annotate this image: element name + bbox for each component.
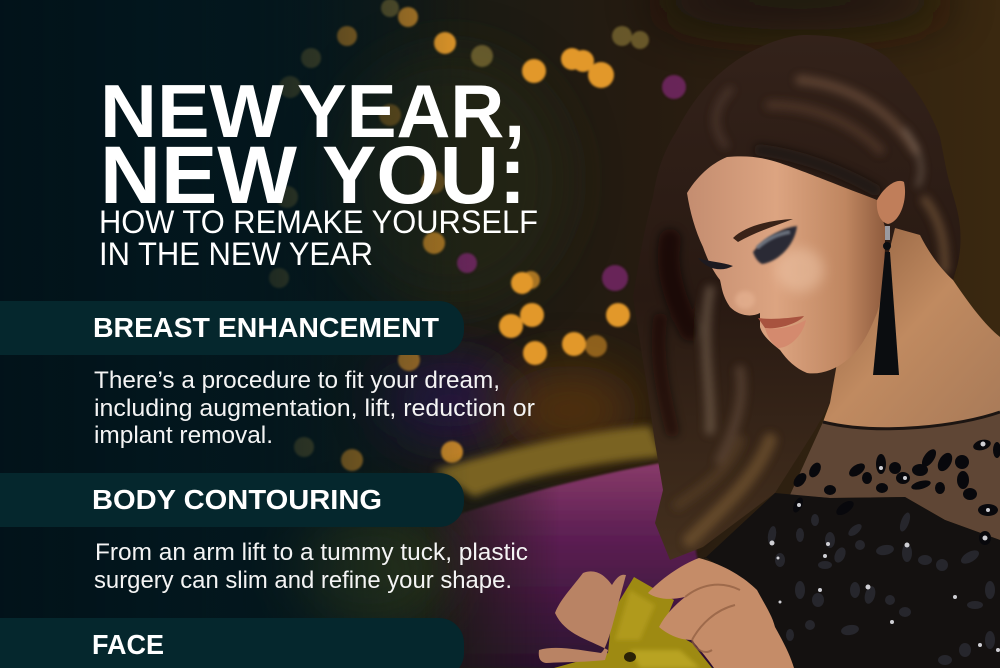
subtitle (99, 204, 538, 272)
dress sheer panel (790, 412, 1000, 540)
body text: implant removal. (94, 422, 273, 449)
dress body (703, 493, 1000, 668)
title line two: NEW (100, 130, 298, 221)
heading band (0, 618, 464, 668)
bokeh lights (269, 0, 686, 471)
heading: BODY CONTOURING (92, 484, 382, 515)
left dark fade (0, 0, 470, 668)
body text: including augmentation, lift, reduction or (94, 395, 535, 422)
panel: body contouring (0, 473, 528, 594)
ear (877, 181, 905, 224)
sofa (445, 462, 714, 668)
cheek highlight (776, 248, 824, 292)
title line two (100, 130, 526, 221)
body text: From an arm lift to a tummy tuck, plastic (95, 539, 528, 566)
title line one: NEW (100, 69, 285, 153)
lips (758, 316, 806, 348)
hair highlights (659, 80, 945, 540)
bead sparkles (770, 442, 1000, 652)
heading: FACE (92, 629, 164, 660)
bodice beads (766, 511, 995, 665)
body text: surgery can slim and refine your shape. (94, 567, 512, 594)
hair back (633, 35, 961, 560)
face (687, 156, 885, 373)
gold sofa rim (434, 426, 663, 497)
dress beads (791, 438, 1000, 545)
body text: There’s a procedure to fit your dream, (94, 367, 500, 394)
heading band (0, 301, 464, 355)
body text (94, 367, 535, 449)
panel: breast enhancement (0, 301, 535, 449)
title (100, 69, 526, 221)
tassel earring (873, 226, 899, 375)
heading: BREAST ENHANCEMENT (93, 312, 439, 343)
title line two: YOU: (322, 130, 526, 221)
eyebrows (733, 219, 793, 242)
subtitle: HOW TO REMAKE YOURSELF (99, 204, 538, 240)
nose highlight (735, 291, 755, 309)
title line one (100, 69, 525, 153)
body text (94, 539, 528, 594)
eye right with smoky shadow (753, 226, 797, 264)
neckline (823, 412, 1000, 429)
panel: face (0, 618, 464, 668)
woman (539, 35, 1000, 668)
heading band (0, 473, 464, 527)
hand right (648, 558, 794, 668)
gold gift bow (554, 577, 712, 668)
hand left (539, 571, 626, 663)
finger lines (685, 585, 740, 652)
neck and shoulder (823, 228, 1000, 428)
title line one: YEAR, (297, 69, 525, 153)
eye left (698, 258, 733, 269)
subtitle: IN THE NEW YEAR (99, 236, 373, 272)
